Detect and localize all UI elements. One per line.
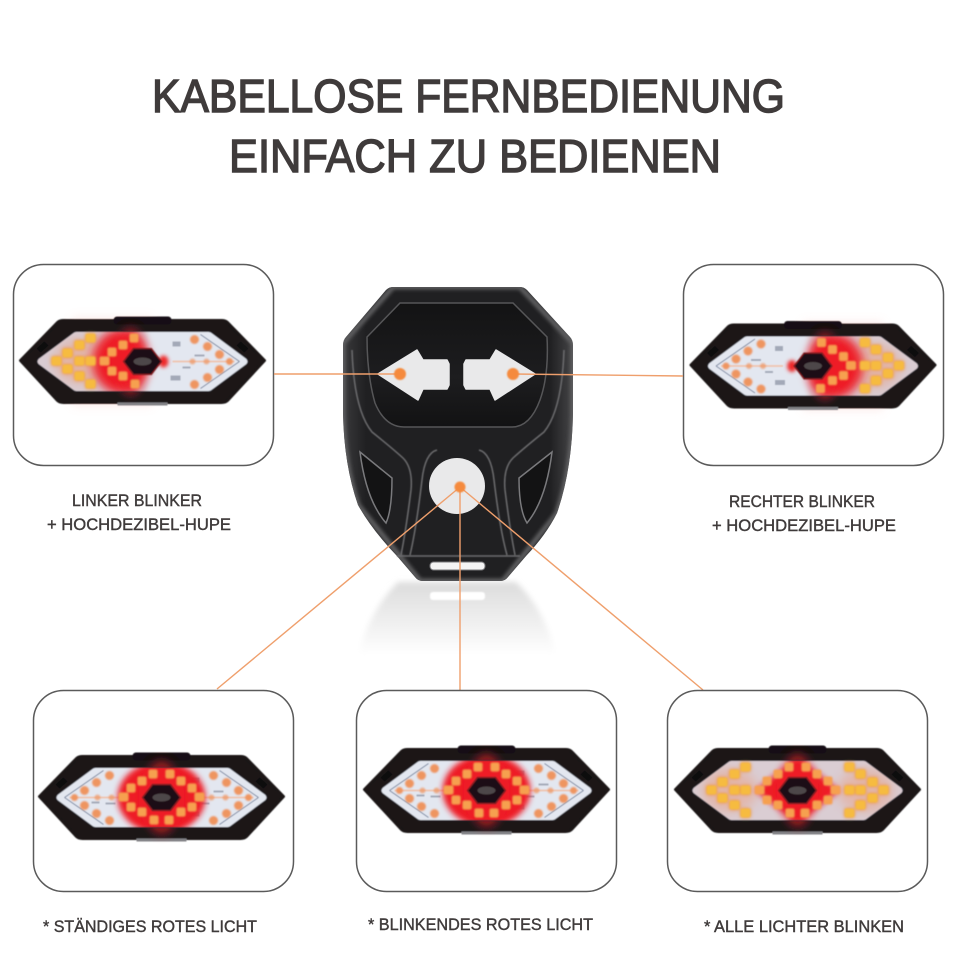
label: steady red light: * STÄNDIGES ROTES LICHT bbox=[43, 918, 257, 936]
label: all lights blinking: * ALLE LICHTER BLINKEN bbox=[704, 918, 904, 936]
panel: right turn signal bbox=[684, 264, 944, 466]
label: left signal bbox=[47, 492, 231, 534]
panel: left turn signal bbox=[14, 264, 274, 466]
left arrow button bbox=[378, 350, 449, 400]
title bbox=[152, 70, 785, 182]
lower ridges bbox=[352, 350, 564, 556]
body rim highlight bbox=[343, 287, 573, 581]
upper button well bbox=[367, 303, 547, 427]
title: KABELLOSE FERNBEDIENUNG bbox=[152, 70, 785, 122]
remote control bbox=[343, 287, 573, 581]
remote reflection bbox=[358, 582, 556, 655]
label: blinking red light: * BLINKENDES ROTES LICHT bbox=[368, 916, 593, 934]
title: EINFACH ZU BEDIENEN bbox=[229, 130, 721, 182]
panel: steady red light bbox=[34, 690, 294, 892]
connector lines bbox=[217, 374, 703, 690]
label: right signal bbox=[712, 493, 896, 535]
side vents bbox=[360, 452, 392, 523]
lanyard slot bbox=[430, 562, 485, 570]
hot spots bbox=[394, 368, 519, 492]
label: right signal: RECHTER BLINKER bbox=[729, 493, 875, 511]
label: left signal: LINKER BLINKER bbox=[72, 492, 202, 510]
round button bbox=[429, 458, 485, 514]
right arrow button bbox=[464, 350, 535, 400]
panel: all lights blinking bbox=[668, 690, 928, 892]
label: left signal: + HOCHDEZIBEL-HUPE bbox=[47, 516, 231, 534]
panel: blinking red light bbox=[356, 690, 616, 892]
label: right signal: + HOCHDEZIBEL-HUPE bbox=[712, 517, 896, 535]
